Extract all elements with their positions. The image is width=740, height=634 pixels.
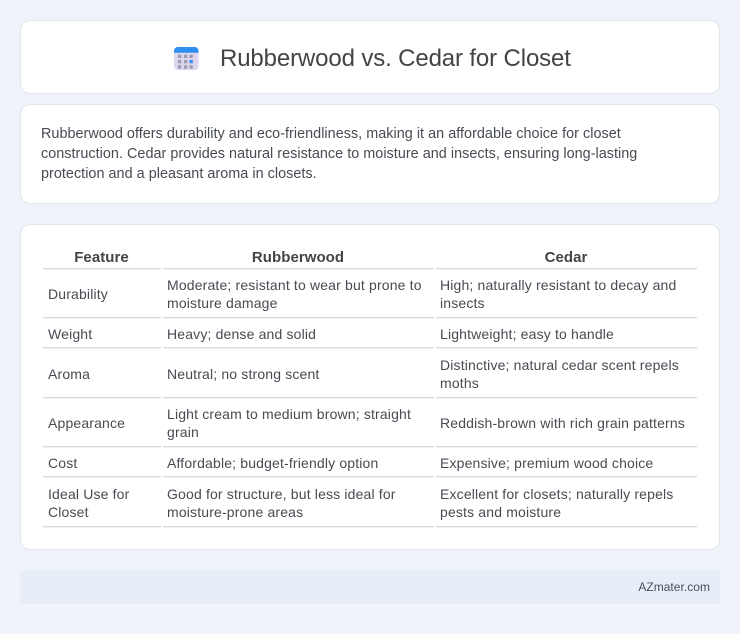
row: weight <box>48 326 614 342</box>
summary text: construction. Cedar provides natural resistance to moisture and insects, ensuring long-lasting <box>41 146 637 162</box>
row: aroma: moths <box>440 375 479 391</box>
row: appearance: Reddish-brown with rich grain patterns <box>440 415 685 431</box>
summary text: protection and a pleasant aroma in closets. <box>41 166 317 182</box>
row: cost: Affordable; budget-friendly option <box>167 455 378 471</box>
row: weight: Weight <box>48 326 92 342</box>
footer credit: AZmater.com <box>638 580 710 594</box>
row: durability: moisture damage <box>167 295 278 311</box>
footer bar <box>20 570 720 604</box>
row: appearance <box>48 406 685 440</box>
panel: summary <box>20 104 720 204</box>
column headers: Rubberwood <box>252 249 344 266</box>
row: durability: High; naturally resistant to decay and <box>440 277 676 293</box>
row: appearance: grain <box>167 424 199 440</box>
row: appearance: Light cream to medium brown; straight <box>167 406 411 422</box>
column headers: Feature <box>74 249 129 266</box>
summary text <box>41 126 637 182</box>
icon: calendar <box>174 47 198 70</box>
row: ideal use for closet: Excellent for closets; naturally repels <box>440 486 673 502</box>
summary text: Rubberwood offers durability and eco-friendliness, making it an affordable choice for closet <box>41 126 621 142</box>
panel: title header <box>20 20 720 94</box>
row: durability: Durability <box>48 286 108 302</box>
row: aroma <box>48 357 679 391</box>
title: Rubberwood vs. Cedar for Closet <box>220 45 571 72</box>
row: weight: Lightweight; easy to handle <box>440 326 614 342</box>
row: weight: Heavy; dense and solid <box>167 326 316 342</box>
row: ideal use for closet: pests and moisture <box>440 504 561 520</box>
column headers <box>74 249 588 266</box>
row: ideal use for closet: Good for structure, but less ideal for <box>167 486 396 502</box>
row: cost: Expensive; premium wood choice <box>440 455 653 471</box>
row: ideal use for closet: moisture-prone areas <box>167 504 303 520</box>
row: durability: insects <box>440 295 485 311</box>
row: aroma: Neutral; no strong scent <box>167 366 319 382</box>
row: aroma: Aroma <box>48 366 90 382</box>
row: durability <box>48 277 676 311</box>
row: appearance: Appearance <box>48 415 125 431</box>
panel: comparison table <box>20 224 720 550</box>
row: ideal use for closet: Closet <box>48 504 89 520</box>
row: cost: Cost <box>48 455 77 471</box>
row: aroma: Distinctive; natural cedar scent repels <box>440 357 679 373</box>
row: ideal use for closet <box>48 486 673 520</box>
row: ideal use for closet: Ideal Use for <box>48 486 129 502</box>
row: durability: Moderate; resistant to wear but prone to <box>167 277 422 293</box>
column headers: Cedar <box>545 249 587 266</box>
row: cost <box>48 455 653 471</box>
